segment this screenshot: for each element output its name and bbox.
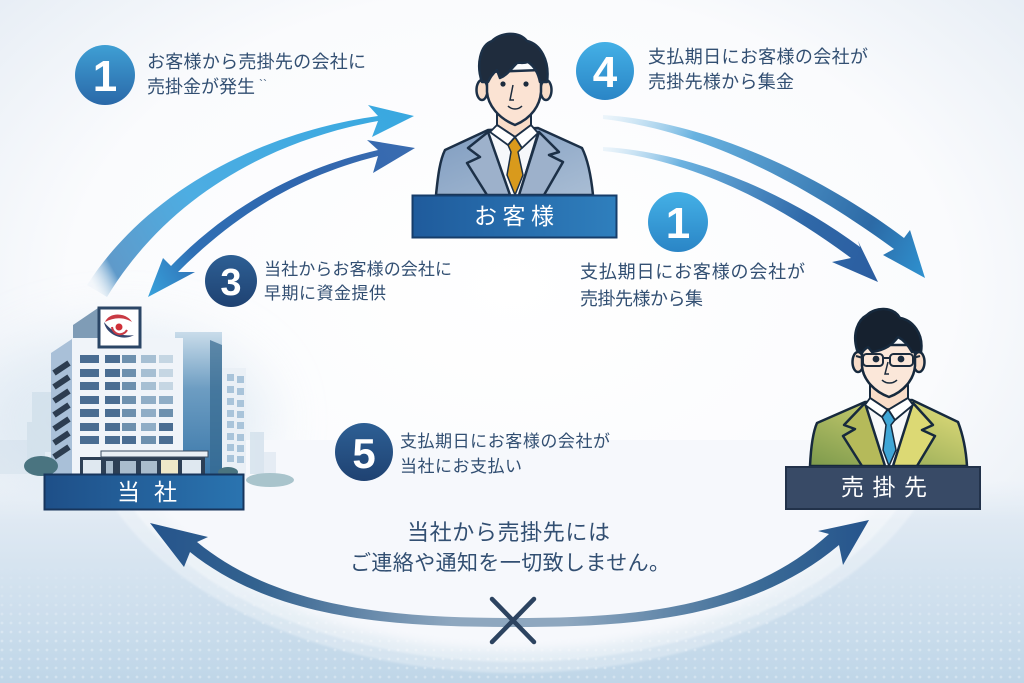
label: company: 当社 xyxy=(117,479,177,505)
side windows xyxy=(54,363,69,457)
text: step 4 xyxy=(648,47,868,92)
badge: step 3: 3 xyxy=(220,262,242,304)
text: step 3: 当社からお客様の会社に xyxy=(264,260,452,279)
party hair xyxy=(855,309,921,353)
company logo sign xyxy=(99,308,140,347)
text: step 4: 売掛先様から集金 xyxy=(648,72,794,92)
text: step 1 right: 支払期日にお客様の会社が xyxy=(580,262,805,282)
entrance canopy xyxy=(101,451,208,457)
label: company xyxy=(44,474,244,510)
badge: step 5: 5 xyxy=(352,430,376,477)
left side wall xyxy=(51,339,72,474)
arrow: right lower xyxy=(603,147,878,282)
customer hair xyxy=(479,34,548,82)
icon: cross mark xyxy=(492,599,534,642)
badge: step 4: 4 xyxy=(593,48,618,97)
arrow: right upper xyxy=(603,115,925,278)
badge: step 1 right: 1 xyxy=(666,199,690,248)
party suit xyxy=(810,400,967,466)
party glasses and face xyxy=(856,354,920,383)
customer face xyxy=(487,70,541,125)
party tie xyxy=(882,409,896,466)
party face xyxy=(862,345,915,397)
badge: step 5 xyxy=(335,423,393,481)
customer suit xyxy=(436,128,593,195)
party neck xyxy=(870,385,908,410)
badge: step 1 top left: 1 xyxy=(93,52,117,101)
label: customer xyxy=(412,196,616,238)
trees xyxy=(24,456,294,487)
party lapels xyxy=(843,403,885,466)
customer shirt xyxy=(488,132,538,195)
badge: step 1 right xyxy=(648,192,708,252)
text: no contact notice: 当社から売掛先には xyxy=(407,520,610,545)
arrow: double-headed dark blue xyxy=(148,140,415,297)
person: accounts receivable party xyxy=(810,309,967,466)
label: accounts receivable party xyxy=(786,467,980,509)
text: step 1 xyxy=(147,52,366,97)
text: step 5 xyxy=(400,432,610,476)
entrance xyxy=(80,457,205,474)
text: step 5: 支払期日にお客様の会社が xyxy=(400,432,610,451)
text: no contact notice: ご連絡や通知を一切致しません。 xyxy=(350,552,670,575)
badge: step 4 xyxy=(576,42,634,100)
customer lapels xyxy=(467,132,510,195)
text: step 1: `` xyxy=(259,77,267,91)
label: accounts receivable party: 売掛先 xyxy=(841,474,927,500)
text: step 4: 支払期日にお客様の会社が xyxy=(648,47,868,67)
party shirt xyxy=(865,403,913,466)
text: step 1 right: 売掛先様から集 xyxy=(580,289,703,309)
right white wing xyxy=(222,368,246,476)
text: step 1: 売掛金が発生 xyxy=(147,77,255,97)
arrow: customer cycle light blue xyxy=(87,105,414,297)
text: step 1: お客様から売掛先の会社に xyxy=(147,52,366,72)
party ears xyxy=(852,352,864,372)
badge: step 3 xyxy=(205,255,257,307)
rear glass tower xyxy=(175,332,222,474)
person: customer xyxy=(436,34,593,195)
distant city xyxy=(0,392,276,474)
customer neck xyxy=(497,110,531,137)
text: no contact notice xyxy=(350,520,670,575)
windows xyxy=(80,355,173,444)
customer eyes and mouth xyxy=(500,81,529,109)
text: step 1 right xyxy=(580,262,805,309)
text: step 3 xyxy=(264,260,452,303)
text: step 5: 当社にお支払い xyxy=(400,457,522,476)
company building xyxy=(0,308,294,487)
customer collar xyxy=(490,125,538,148)
front wall xyxy=(72,338,183,474)
roof block xyxy=(73,308,100,340)
badge: step 1 top left xyxy=(75,45,135,105)
text: step 3: 早期に資金提供 xyxy=(264,284,386,303)
customer tie xyxy=(507,137,523,195)
label: customer: お客様 xyxy=(474,203,554,229)
party collar xyxy=(865,398,913,420)
customer ears xyxy=(476,80,488,100)
arrow: bottom double-headed xyxy=(150,520,869,627)
